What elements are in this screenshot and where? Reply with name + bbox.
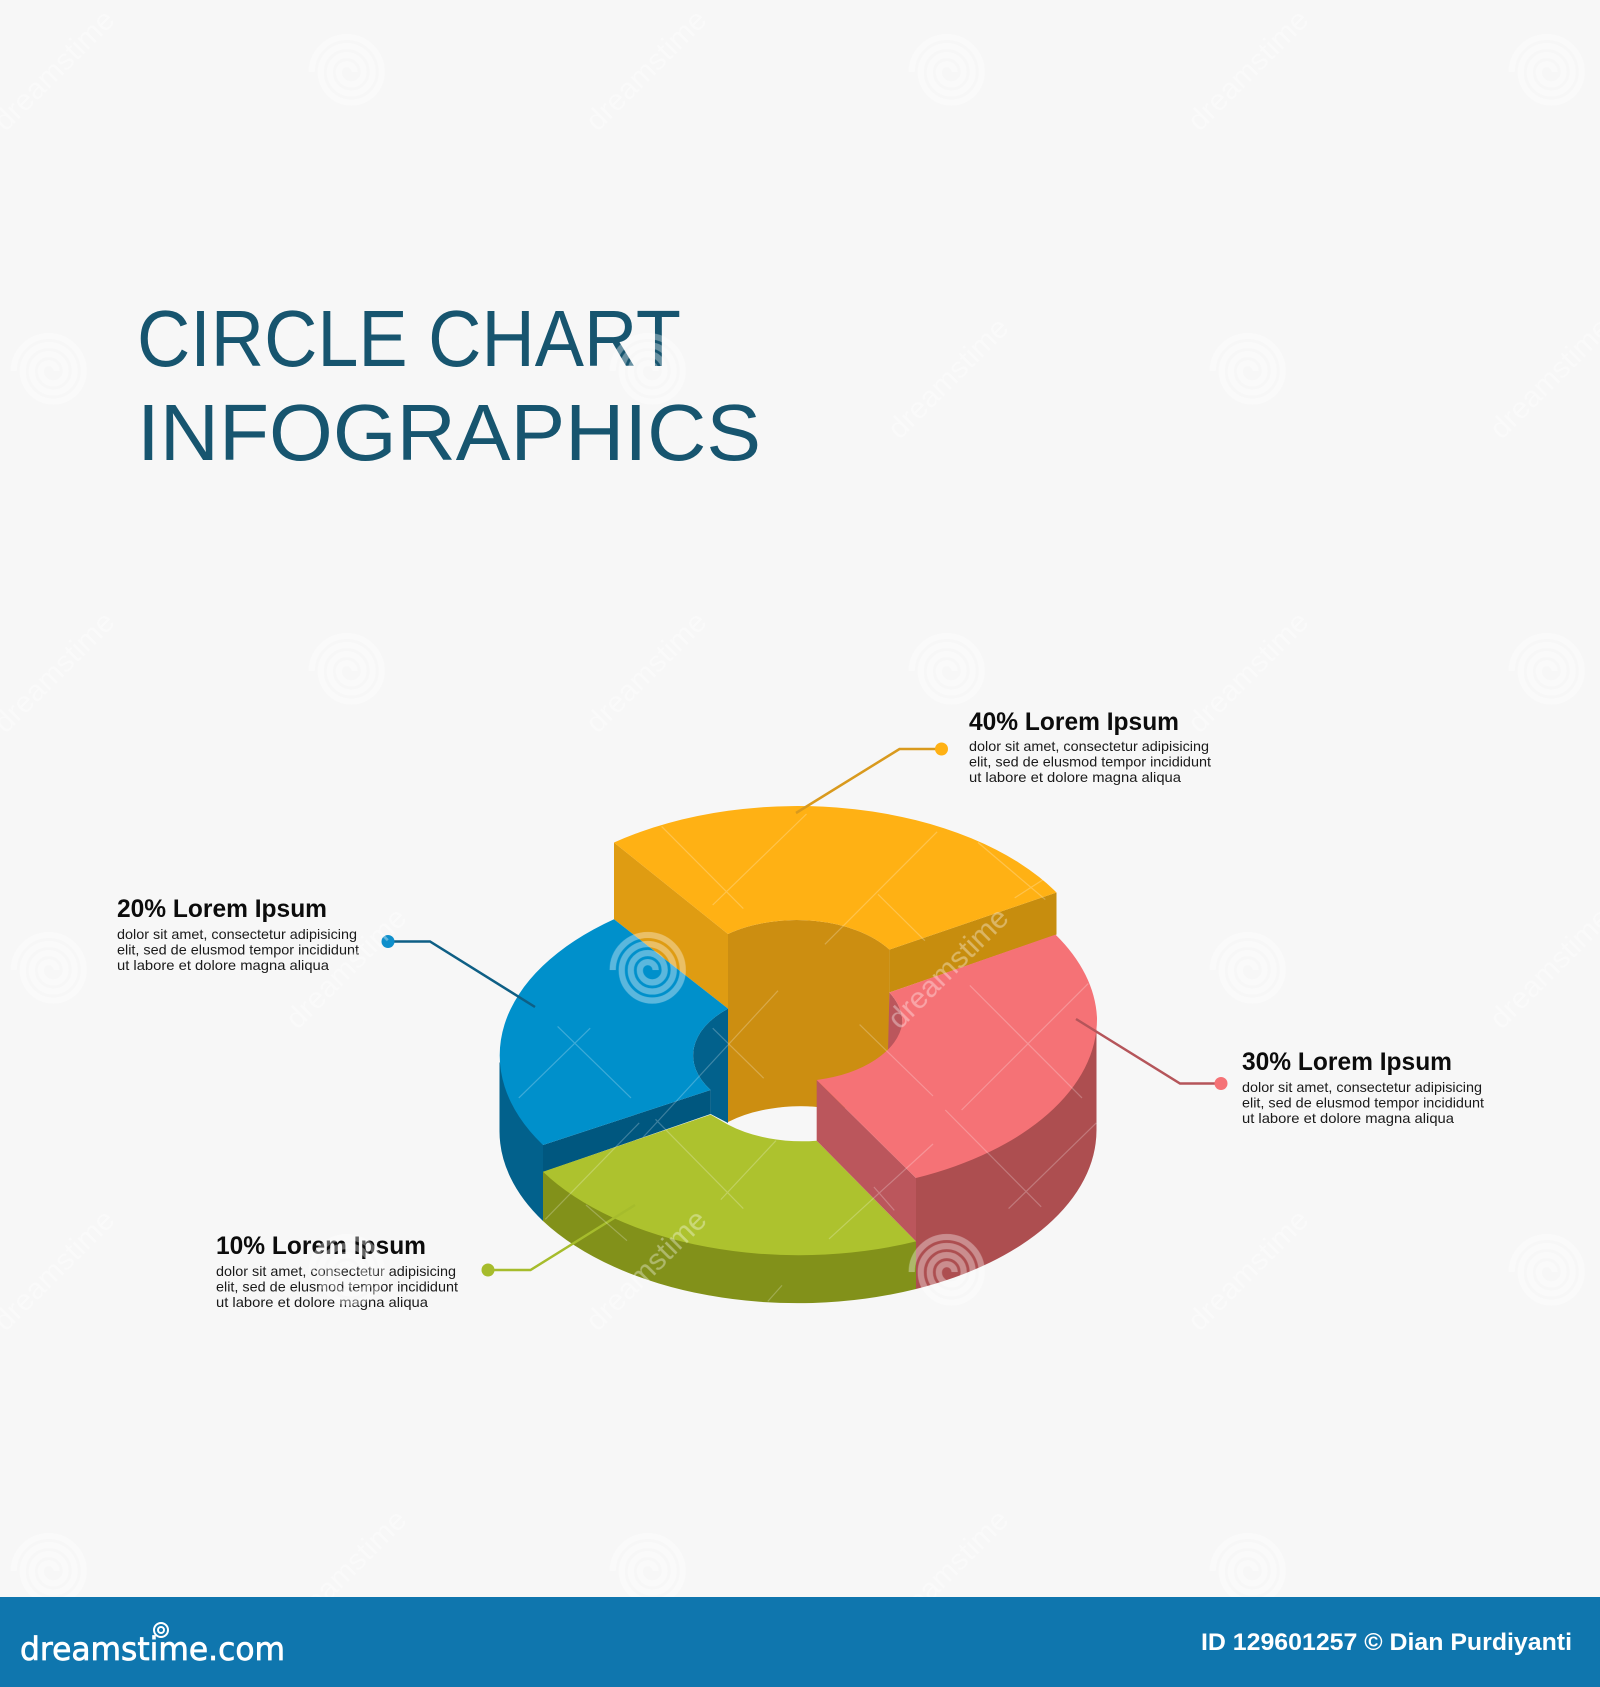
watermark text: dreamstime <box>279 901 413 1035</box>
watermark text: dreamstime <box>881 311 1015 445</box>
footer logo text: dreamstime.com <box>20 1630 285 1668</box>
watermark text: dreamstime <box>881 901 1015 1035</box>
watermark text: dreamstime <box>1181 1203 1315 1337</box>
title: INFOGRAPHICS <box>137 388 761 477</box>
connector: 40% <box>796 742 948 813</box>
watermark text: dreamstime <box>1181 605 1315 739</box>
watermark text: dreamstime <box>579 3 713 137</box>
donut chart <box>499 806 1097 1303</box>
label text: 10%: dolor sit amet, consectetur adipisicing <box>216 1263 456 1279</box>
watermark text: dreamstime <box>1181 3 1315 137</box>
callout: 30% <box>1076 1019 1484 1126</box>
label text: 10% <box>216 1232 458 1310</box>
centre hole <box>728 1106 817 1142</box>
label text: 40%: elit, sed de elusmod tempor incididunt <box>969 754 1211 770</box>
label text: 20% <box>117 895 359 973</box>
callout: 40% <box>796 708 1211 813</box>
label text: 20%: dolor sit amet, consectetur adipisicing <box>117 926 357 942</box>
blue segment: 20% <box>499 919 728 1221</box>
label text: 10%: elit, sed de elusmod tempor incididunt <box>216 1278 458 1294</box>
watermark text: dreamstime <box>579 605 713 739</box>
footer credit: ID 129601257 © Dian Purdiyanti <box>1201 1629 1572 1656</box>
label text: 40%: dolor sit amet, consectetur adipisicing <box>969 738 1209 754</box>
connector: 20% <box>382 935 535 1007</box>
label text: 40%: 40% Lorem Ipsum <box>969 708 1179 736</box>
label text: 40% <box>969 708 1211 785</box>
label text: 10%: 10% Lorem Ipsum <box>216 1232 426 1260</box>
watermark text: dreamstime <box>279 1503 413 1637</box>
watermark text: dreamstime <box>579 1203 713 1337</box>
label text: 10%: ut labore et dolore magna aliqua <box>216 1294 428 1310</box>
footer logo spiral <box>154 1623 168 1637</box>
red segment: 30% <box>817 935 1097 1289</box>
callout: 10% <box>216 1205 635 1310</box>
label text: 30%: ut labore et dolore magna aliqua <box>1242 1110 1454 1126</box>
label text: 30%: 30% Lorem Ipsum <box>1242 1048 1452 1076</box>
connector: 10% <box>482 1205 635 1276</box>
label text: 40%: ut labore et dolore magna aliqua <box>969 769 1181 785</box>
label text: 30%: elit, sed de elusmod tempor incididunt <box>1242 1094 1484 1110</box>
callout: 20% <box>117 895 535 1007</box>
title: CIRCLE CHART <box>137 294 681 383</box>
label text: 20%: elit, sed de elusmod tempor incididunt <box>117 942 359 958</box>
yellow segment: 40% <box>614 806 1056 1122</box>
title <box>137 294 761 477</box>
label text: 30% <box>1242 1048 1484 1126</box>
watermark text: dreamstime <box>881 1503 1015 1637</box>
footer bar <box>0 1597 1600 1687</box>
green segment: 10% <box>543 1115 916 1303</box>
label text: 20%: 20% Lorem Ipsum <box>117 895 327 923</box>
label text: 20%: ut labore et dolore magna aliqua <box>117 957 329 973</box>
connector: 30% <box>1076 1019 1228 1090</box>
label text: 30%: dolor sit amet, consectetur adipisicing <box>1242 1079 1482 1095</box>
